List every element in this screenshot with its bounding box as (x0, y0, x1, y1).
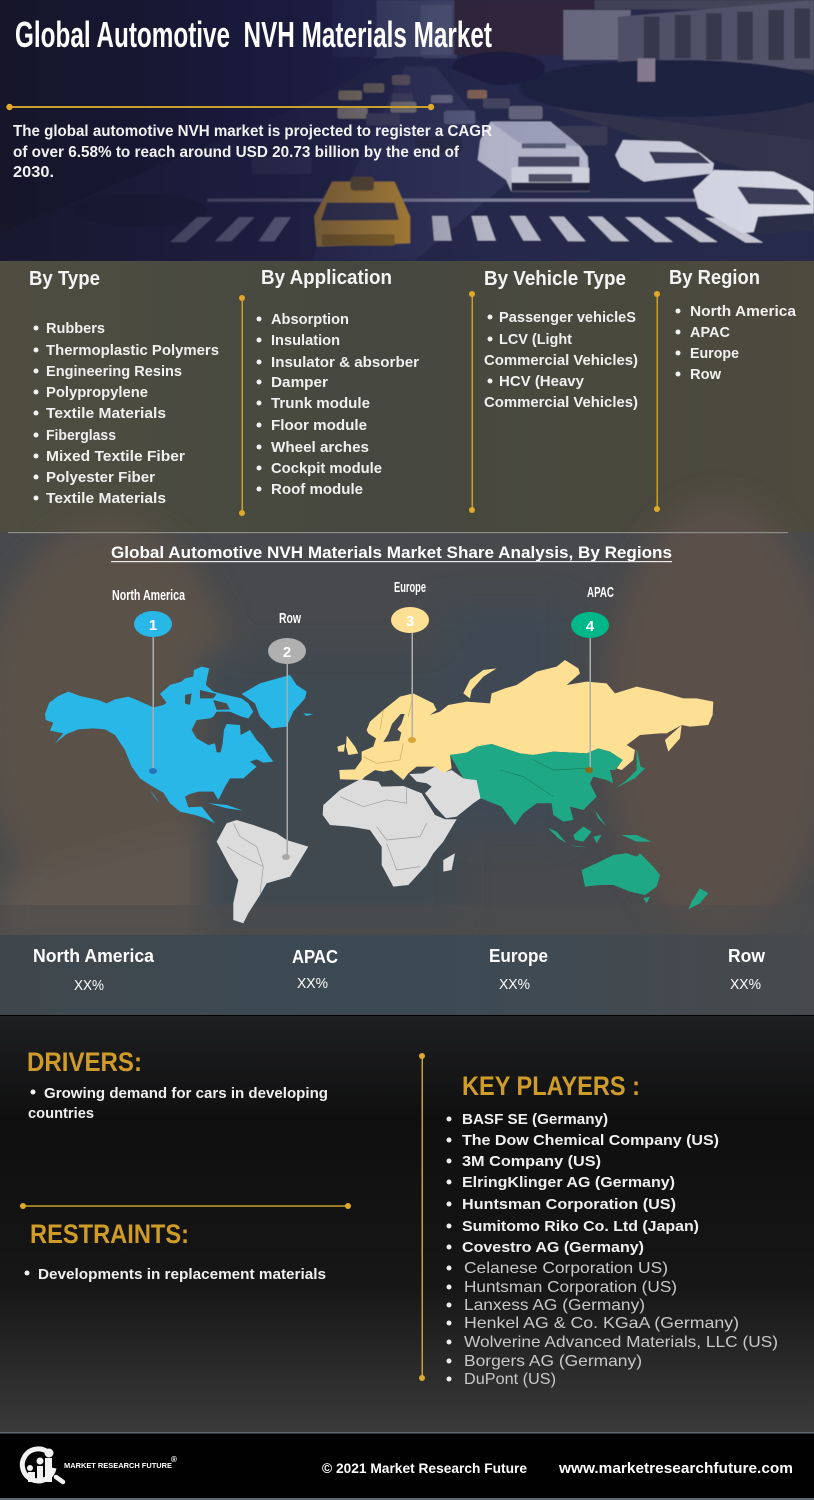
divider: gold vertical 2 (469, 291, 475, 513)
list: key players: The Dow Chemical Company (US) (462, 1132, 719, 1149)
list: types: Polypropylene (46, 384, 148, 401)
list: types: Polyester Fiber (46, 469, 155, 486)
divider: gold vertical in lower section (419, 1053, 425, 1381)
text block: drivers list (28, 1085, 328, 1122)
panel: By Application (256, 267, 419, 498)
list: applications (256, 311, 419, 498)
list: applications: Insulation (271, 332, 340, 349)
list: vehicle types: Passenger vehicleS (499, 309, 636, 326)
list: key players: BASF SE (Germany) (462, 1111, 608, 1128)
list: types: Thermoplastic Polymers (46, 342, 219, 359)
panel: statistics band background (0, 935, 814, 1015)
heading: drivers: DRIVERS: (27, 1047, 142, 1077)
list: regions: Europe (690, 345, 739, 362)
list: key players: DuPont (US) (464, 1371, 556, 1388)
callout: Row marker (268, 610, 306, 860)
list: key players: Wolverine Advanced Materials, LLC (US) (464, 1334, 778, 1351)
list: key players (446, 1111, 778, 1388)
list: types: Rubbers (46, 320, 105, 337)
title: Global Automotive NVH Materials Market (15, 14, 492, 55)
divider: gold line between drivers and restraints (20, 1203, 351, 1209)
divider: gold vertical 1 (239, 295, 245, 516)
list: types: Fiberglass (46, 427, 116, 444)
map region: Africa and Middle East (323, 767, 481, 887)
road (0, 57, 814, 260)
panel: By Type (29, 268, 219, 507)
list: types: Engineering Resins (46, 363, 182, 380)
callout: Europe marker (391, 579, 429, 743)
stat: North America share (33, 946, 155, 994)
list: key players: Henkel AG & Co. KGaA (Germany) (464, 1315, 739, 1332)
list: applications: Wheel arches (271, 439, 369, 456)
list: key players: ElringKlinger AG (Germany) (462, 1174, 675, 1191)
map region: Europe and Russia (337, 660, 713, 780)
stat: Row share (728, 946, 766, 993)
list: applications: Insulator & absorber (271, 354, 419, 371)
logo: Market Research Future: MARKET RESEARCH FUTURE (64, 1461, 172, 1470)
callout: APAC marker (571, 584, 614, 773)
list: regions: Row (690, 366, 721, 383)
panel: drivers and players background (0, 1016, 814, 1432)
list: vehicle types: Commercial Vehicles) (484, 352, 638, 369)
list: key players: Huntsman Corporation (US) (462, 1196, 676, 1213)
list: vehicle types: LCV (Light (499, 331, 572, 348)
list: regions: North America (690, 303, 797, 320)
crosswalk (432, 216, 763, 243)
callout: Row marker: Row (279, 610, 301, 627)
heading: restraints: RESTRAINTS: (30, 1219, 189, 1249)
heading: By Type: By Type (29, 268, 100, 290)
list: applications: Absorption (271, 311, 349, 328)
stat: APAC share (292, 947, 338, 992)
list: key players: Borgers AG (Germany) (464, 1353, 642, 1370)
divider: gold line in header (6, 104, 434, 110)
panel: header photo of city traffic (0, 0, 814, 261)
list: key players: 3M Company (US) (462, 1153, 601, 1170)
text block: market intro (13, 123, 492, 181)
panel: key players (446, 1071, 778, 1388)
heading: By Vehicle Type: By Vehicle Type (484, 268, 626, 290)
trees and sidewalk (550, 107, 814, 187)
stat: Europe share: Europe (489, 946, 548, 966)
text block: market intro: 2030. (13, 164, 54, 181)
panel: footer background (0, 1432, 814, 1500)
logo: Market Research Future (22, 1448, 177, 1482)
callout: North America marker: North America (112, 587, 185, 604)
list: vehicle types: Commercial Vehicles) (484, 394, 638, 411)
callout: North America marker: 1 (149, 617, 157, 634)
text: copyright: © 2021 Market Research Future (322, 1460, 527, 1476)
list: vehicle types (484, 309, 638, 411)
list: key players: Celanese Corporation US) (464, 1260, 668, 1277)
list: key players: Sumitomo Riko Co. Ltd (Japan) (462, 1218, 699, 1235)
taxi (314, 182, 410, 247)
stat: North America share: XX% (74, 977, 104, 994)
callout: Europe marker: 3 (406, 613, 414, 630)
panel: segmentation background (0, 261, 814, 536)
panel: By Vehicle Type (484, 268, 638, 411)
stat: Row share: Row (728, 946, 766, 966)
heading: map section title: Global Automotive NVH Materials Market Share Analysis, By Regions (111, 543, 672, 562)
list: types: Textile Materials (46, 490, 166, 507)
van 2 (693, 170, 814, 233)
stat: Row share: XX% (730, 976, 761, 993)
stat: Europe share (489, 946, 548, 993)
panel: map section background (0, 500, 814, 950)
list: key players: Huntsman Corporation (US) (464, 1279, 677, 1296)
chart: world map by region (45, 660, 713, 923)
panel: restraints (24, 1219, 326, 1283)
list: regions (676, 303, 797, 383)
list: key players: Covestro AG (Germany) (462, 1239, 644, 1256)
left dark overlay (0, 0, 814, 260)
callout: North America marker (112, 587, 185, 774)
list: applications: Trunk module (271, 395, 370, 412)
map region: South America (217, 820, 308, 923)
list: applications: Roof module (271, 481, 363, 498)
list: regions: APAC (690, 324, 730, 341)
divider: gold vertical 3 (654, 291, 660, 512)
text block: drivers list: Growing demand for cars in developing (44, 1085, 328, 1102)
text block: market intro: of over 6.58% to reach around USD 20.73 billion by the end of (13, 144, 460, 161)
text: website: www.marketresearchfuture.com (558, 1460, 793, 1477)
callout: APAC marker: 4 (586, 618, 595, 635)
Baltic sea (383, 714, 405, 742)
text block: drivers list: countries (28, 1105, 94, 1122)
left parked cars (73, 193, 208, 227)
sea gaps in the Canadian Arctic (185, 690, 230, 710)
heading: key players: KEY PLAYERS : (462, 1071, 640, 1101)
text block: restraints list: Developments in replacement materials (38, 1266, 326, 1283)
panel: drivers (27, 1047, 328, 1122)
list: applications: Damper (271, 374, 328, 391)
heading: By Region: By Region (669, 267, 760, 289)
callout: APAC marker: APAC (587, 584, 614, 601)
stat: APAC share: XX% (297, 975, 328, 992)
stat: North America share: North America (33, 946, 155, 966)
stat: APAC share: APAC (292, 947, 338, 967)
list: applications: Cockpit module (271, 460, 382, 477)
distant cars (252, 75, 607, 174)
callout: Europe marker: Europe (394, 579, 426, 596)
panel: By Region (669, 267, 797, 383)
callout: Row marker: 2 (283, 644, 291, 661)
van 1 (615, 140, 714, 182)
buildings and sky (374, 0, 457, 58)
list: types: Mixed Textile Fiber (46, 448, 185, 465)
list: types (34, 320, 219, 507)
bus (478, 122, 589, 192)
map region: North America (45, 667, 313, 823)
list: vehicle types: HCV (Heavy (499, 373, 585, 390)
list: applications: Floor module (271, 417, 367, 434)
stop line (208, 199, 696, 202)
logo: Market Research Future: ® (171, 1455, 177, 1464)
list: key players: Lanxess AG (Germany) (464, 1297, 645, 1314)
stat: Europe share: XX% (499, 976, 530, 993)
map region: Asia Pacific (450, 744, 708, 909)
text block: market intro: The global automotive NVH market is projected to register a CAGR (13, 123, 492, 140)
list: types: Textile Materials (46, 405, 166, 422)
heading: By Application: By Application (261, 267, 392, 289)
